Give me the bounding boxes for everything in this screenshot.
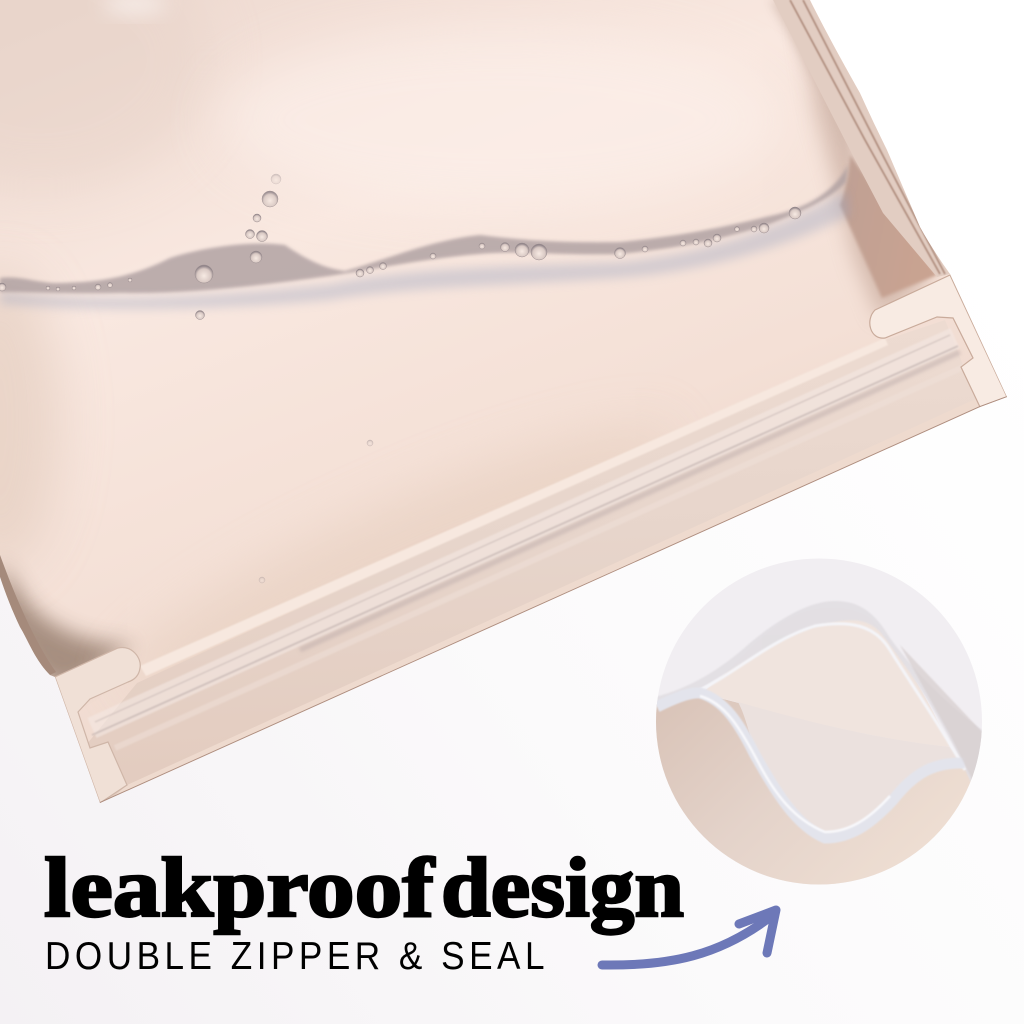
bottom outline (100, 397, 1007, 803)
lower seal strip (116, 590, 566, 794)
lower zipper highlights (700, 696, 890, 832)
arrow (602, 910, 776, 965)
right edge seal strip (773, 0, 950, 277)
left edge seal (0, 555, 56, 675)
upper seam highlight (140, 338, 888, 676)
circle backdrop (658, 558, 982, 740)
lower zipper strip (657, 693, 965, 838)
interior back panel (706, 620, 950, 747)
arrow shaft (602, 915, 773, 965)
water droplets and bubbles (0, 174, 801, 583)
water line shadow (0, 190, 850, 309)
zipper ridges (92, 335, 968, 748)
right seal lines (790, 0, 945, 274)
beige surface (656, 698, 972, 884)
arrow head (739, 910, 776, 953)
soft shading on pouch (0, 0, 930, 732)
right tab (870, 275, 1007, 407)
dark right gusset (840, 155, 937, 298)
upper zipper strip (655, 601, 985, 785)
zipper band (89, 420, 744, 798)
title word two: design (441, 841, 684, 935)
water line (0, 165, 848, 293)
upper zipper lines (700, 624, 965, 770)
right side strip (901, 647, 982, 778)
left tab (55, 648, 140, 803)
subtitle: DOUBLE ZIPPER & SEAL (45, 935, 549, 978)
title (44, 841, 684, 935)
interior front panel (738, 702, 956, 830)
inset photo circle: open zipper (650, 550, 990, 890)
title word one: leakproof (44, 841, 436, 935)
